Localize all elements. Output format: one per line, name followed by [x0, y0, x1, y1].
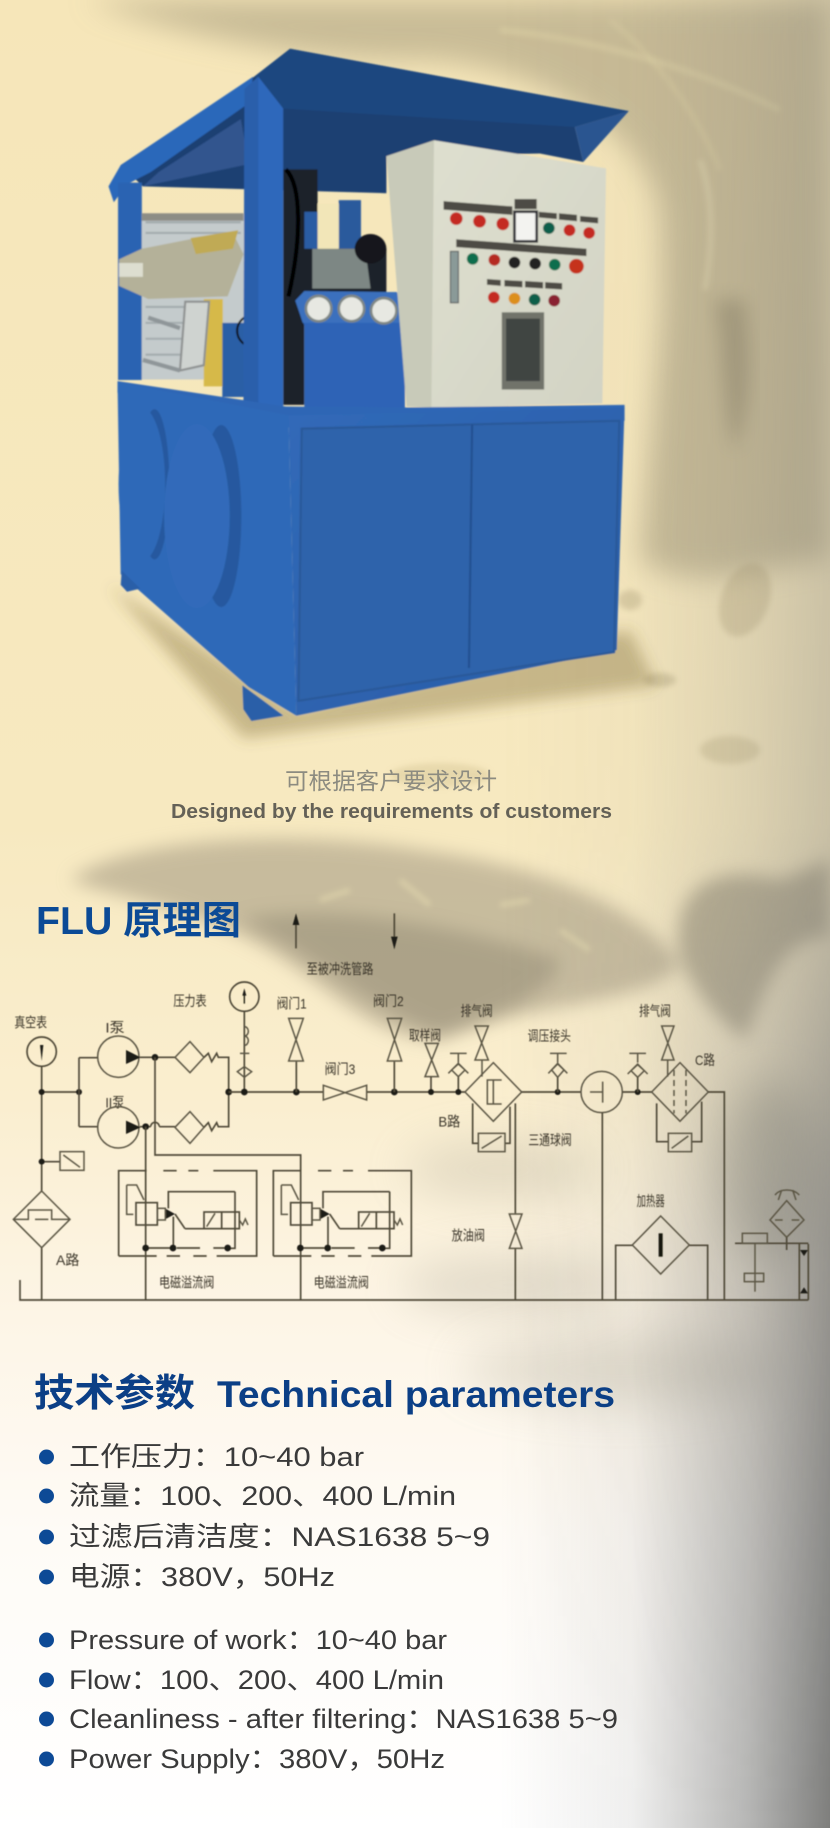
sampling valve and check fitting [409, 1028, 468, 1130]
test port, three-way valve line and drain valve: 放油阀 [452, 1228, 485, 1244]
item: flow rate: 流量：100、200、400 L/min [69, 1481, 456, 1511]
filter C with vent valve and bypass: C路 [695, 1052, 715, 1068]
hydraulic schematic diagram [13, 913, 808, 1300]
main pressure line with gauge and valves 1 to 3: 阀门1 [277, 995, 307, 1011]
main pressure line with gauge and valves 1 to 3: 阀门3 [325, 1061, 356, 1077]
central dark pipework [237, 169, 386, 405]
heater [616, 1193, 708, 1299]
check valves [175, 1042, 232, 1143]
pilot lines to solenoid relief valves [20, 1057, 808, 1300]
pressure gauges [306, 296, 396, 323]
rear columns [118, 183, 142, 380]
control cabinet [386, 140, 606, 408]
flow arrows to flushed line [293, 913, 398, 977]
panel label strips [444, 199, 598, 290]
product photo: blue FLU flushing unit [109, 49, 656, 738]
item: pressure of work: Pressure of work：10~40 bar [69, 1625, 447, 1655]
specification list: Chinese [39, 1442, 490, 1592]
main pressure line with gauge and valves 1 to 3 [173, 982, 465, 1100]
heading: technical parameters: Technical parameters [217, 1374, 615, 1415]
flow meter [450, 251, 458, 303]
test port, three-way valve line and drain valve: 三通球阀 [528, 1132, 572, 1148]
item: working pressure: 工作压力：10~40 bar [69, 1442, 364, 1472]
gauge box [295, 291, 405, 409]
sampling valve and check fitting: B路 [438, 1114, 460, 1130]
feet [121, 571, 140, 592]
roof top [254, 49, 629, 127]
filter B with vent valve and bypass [461, 1003, 522, 1152]
breather, tank and level gauge [735, 1190, 808, 1300]
item: power supply: Power Supply：380V，50Hz [69, 1744, 445, 1774]
flow meter circle [581, 1071, 652, 1300]
indicator lights and switches [450, 212, 595, 306]
item: cleanliness: Cleanliness - after filtering：NAS1638 5~9 [69, 1704, 618, 1734]
vacuum gauge and suction filter A [13, 1014, 84, 1300]
left hydraulic block and pump equipment [119, 214, 249, 397]
vacuum gauge and suction filter A: 真空表 [14, 1014, 47, 1030]
roof left beam [109, 77, 253, 202]
test port, three-way valve line and drain valve [452, 1028, 581, 1300]
flow arrows to flushed line: 至被冲洗管路 [307, 961, 373, 977]
vacuum gauge and suction filter A: A路 [56, 1252, 79, 1268]
front column [243, 77, 283, 409]
pumps I and II [79, 1020, 175, 1148]
ammeter [514, 212, 537, 241]
filter C with vent valve and bypass: 排气阀 [639, 1003, 671, 1019]
solenoid relief valve 1: 电磁溢流阀 [159, 1274, 214, 1290]
machine ground shadow [109, 585, 656, 738]
heater: 加热器 [637, 1193, 665, 1209]
solenoid relief valve 2 [273, 1171, 411, 1290]
caption: Chinese: 可根据客户要求设计 [285, 768, 497, 794]
roof underside [121, 49, 629, 193]
solenoid relief valve 1 [119, 1171, 257, 1290]
main pressure line with gauge and valves 1 to 3: 阀门2 [373, 993, 404, 1009]
solenoid relief valve 2: 电磁溢流阀 [314, 1274, 369, 1290]
item: cleanliness after filtering: 过滤后清洁度：NAS1638 5~9 [69, 1522, 490, 1552]
heading: FLU schematic: FLU 原理图 [36, 900, 241, 943]
pumps I and II: I泵 [105, 1020, 125, 1036]
sampling valve and check fitting: 取样阀 [409, 1028, 441, 1044]
test port, three-way valve line and drain valve: 调压接头 [528, 1028, 571, 1044]
base tank [118, 381, 625, 721]
round flanges [119, 408, 241, 608]
main pressure line with gauge and valves 1 to 3: 压力表 [173, 993, 207, 1009]
filter B with vent valve and bypass: 排气阀 [461, 1003, 493, 1019]
specification list: English [39, 1625, 618, 1774]
heading: technical parameters [34, 1373, 615, 1415]
right half of circuit [409, 1003, 808, 1300]
nameplate [502, 312, 544, 390]
item: power supply: 电源：380V，50Hz [69, 1562, 335, 1592]
caption: English: Designed by the requirements of customers [171, 801, 612, 823]
pumps I and II: II泵 [105, 1095, 125, 1111]
item: flow: Flow：100、200、400 L/min [69, 1665, 444, 1695]
heading: technical parameters: 技术参数 [34, 1373, 195, 1415]
filter C with vent valve and bypass [628, 1003, 724, 1300]
